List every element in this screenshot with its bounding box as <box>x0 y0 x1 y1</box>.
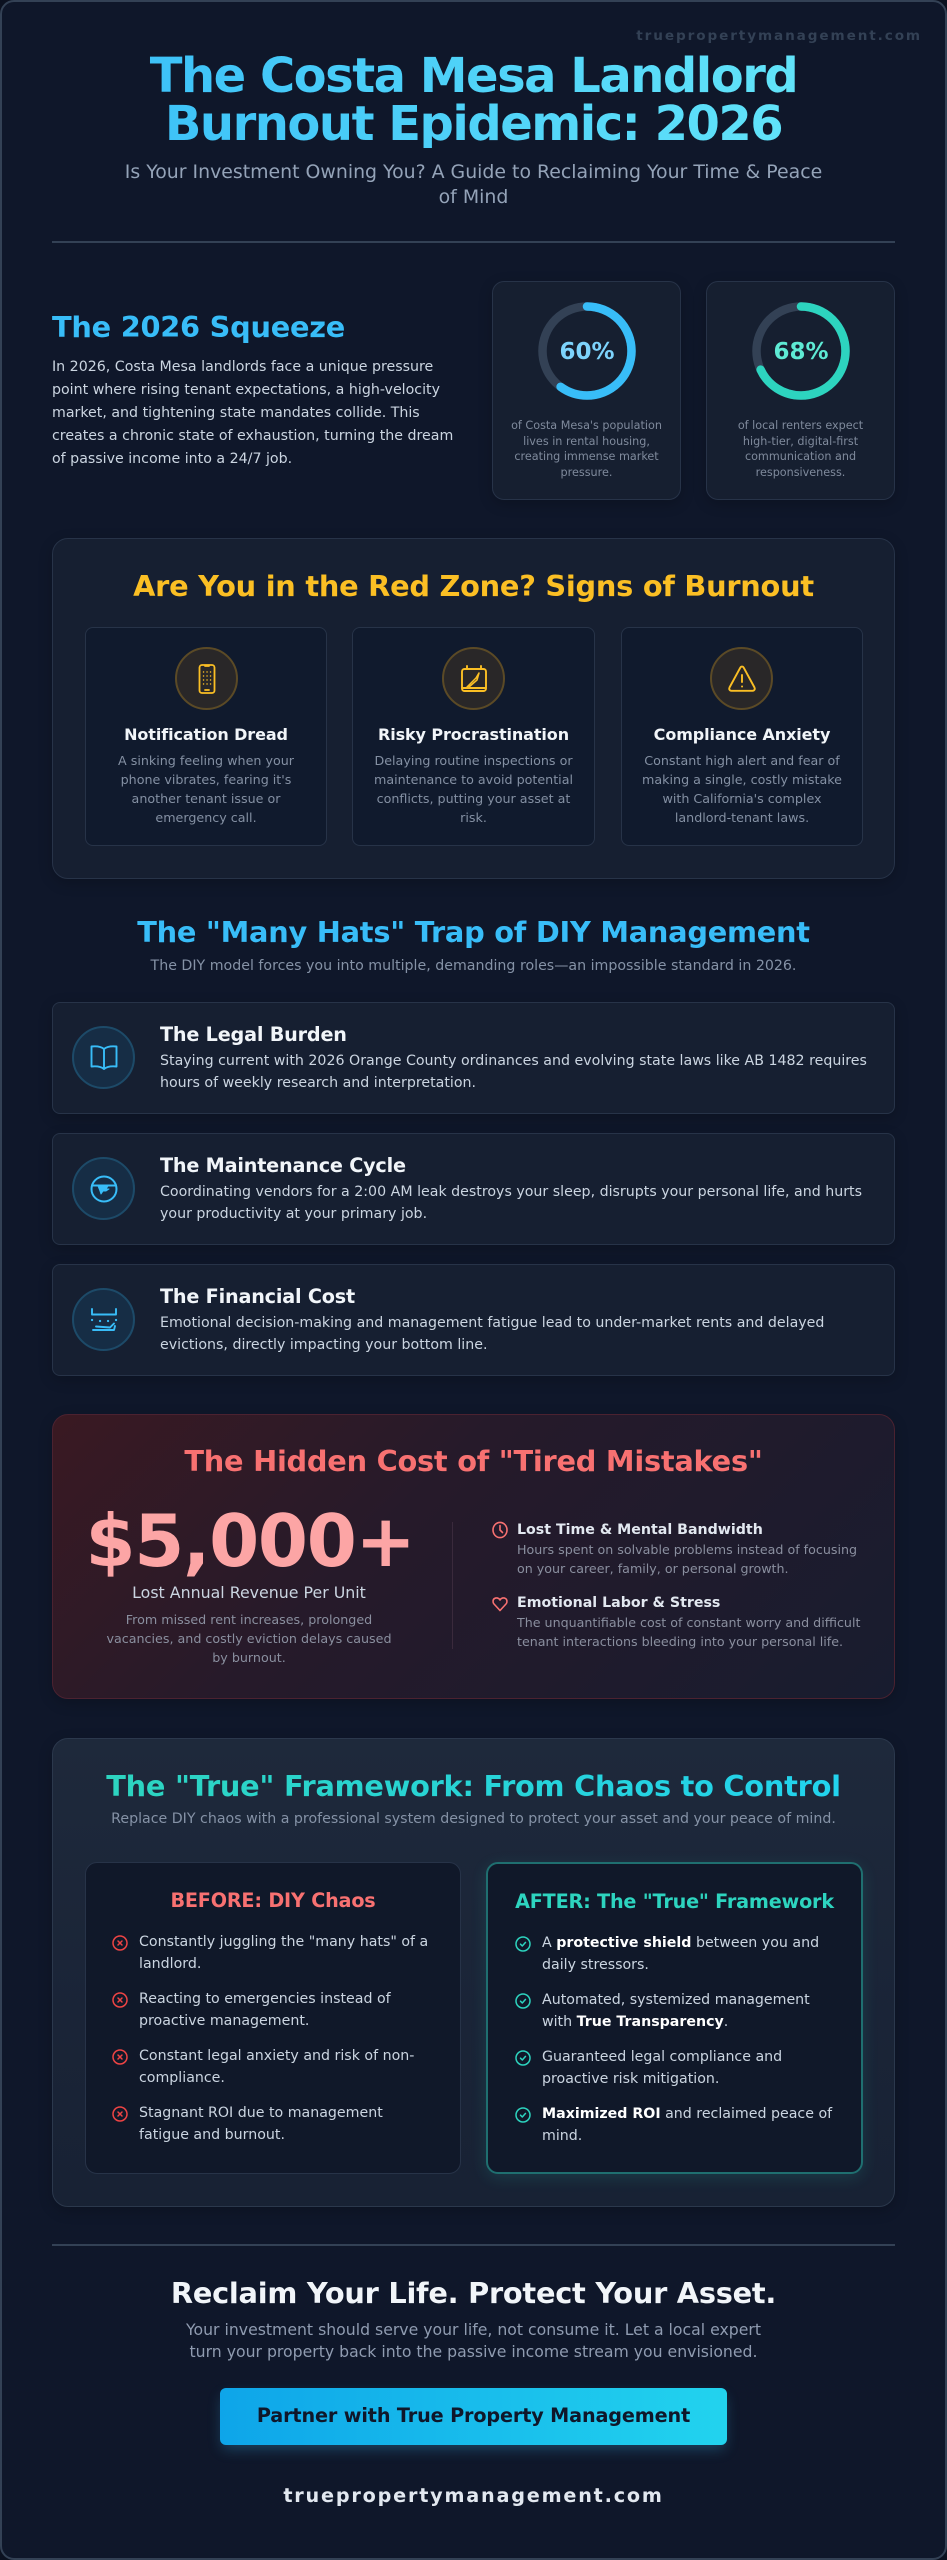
card text: emergency call. <box>155 810 257 825</box>
before item 1 <box>112 1934 428 1972</box>
squeeze body text: creates a chronic state of exhaustion, turning the dream <box>52 428 453 444</box>
panel: the legal burden <box>52 1002 895 1114</box>
item text: on your career, family, or personal growth. <box>517 1561 789 1576</box>
stat caption: pressure. <box>561 466 612 479</box>
icon: open book <box>72 1026 135 1089</box>
item text: proactive risk mitigation. <box>542 2071 719 2087</box>
role text: your productivity at your primary job. <box>160 1206 427 1222</box>
before item 2 <box>112 1991 391 2029</box>
icon: x circle <box>112 2106 128 2122</box>
item text <box>517 1542 857 1576</box>
icon: check circle <box>515 2050 531 2066</box>
item text: Constantly juggling the "many hats" of a <box>139 1934 428 1950</box>
card text <box>374 753 573 825</box>
role text: Staying current with 2026 Orange County ordinances and evolving state laws like AB 1482 requires <box>160 1053 867 1069</box>
stat caption: creating immense market <box>514 450 659 463</box>
item title: Lost Time & Mental Bandwidth <box>517 1522 763 1538</box>
subtitle: Is Your Investment Owning You? A Guide to Reclaiming Your Time & Peace <box>125 161 822 183</box>
role title: The Financial Cost <box>160 1285 355 1308</box>
card title: Risky Procrastination <box>378 725 569 744</box>
card: notification dread <box>85 627 327 846</box>
cost item: lost time <box>492 1522 857 1576</box>
card: compliance anxiety <box>621 627 863 846</box>
item text <box>542 1992 810 2030</box>
item text: with True Transparency. <box>542 2014 728 2030</box>
stat caption: of local renters expect <box>738 419 863 432</box>
item text: landlord. <box>139 1956 201 1972</box>
icon: phone <box>175 647 238 710</box>
item text <box>139 1991 391 2029</box>
icon: check circle <box>515 1993 531 2009</box>
ring chart: 60%: 60% <box>559 339 615 365</box>
icon: x circle <box>112 1992 128 2008</box>
ring chart: 68%: 68% <box>773 339 829 365</box>
title: Burnout Epidemic: 2026 <box>165 96 782 152</box>
item text: daily stressors. <box>542 1957 649 1973</box>
card text: making a single, costly mistake <box>642 772 842 787</box>
footer url: truepropertymanagement.com <box>283 2484 664 2507</box>
panel: the maintenance cycle <box>52 1133 895 1245</box>
framework subtitle: Replace DIY chaos with a professional system designed to protect your asset and your peace of mind. <box>111 1811 836 1827</box>
after heading: AFTER: The "True" Framework <box>515 1890 834 1913</box>
cta text: Your investment should serve your life, not consume it. Let a local expert <box>186 2320 761 2339</box>
icon: warning triangle <box>710 647 773 710</box>
squeeze body text: point where rising tenant expectations, a high-velocity <box>52 382 440 398</box>
card text: landlord-tenant laws. <box>675 810 809 825</box>
after item 3 <box>515 2049 782 2087</box>
role text: Emotional decision-making and management fatigue lead to under-market rents and delayed <box>160 1315 824 1331</box>
cta button <box>220 2388 727 2445</box>
squeeze body text: In 2026, Costa Mesa landlords face a unique pressure <box>52 359 433 375</box>
role text <box>160 1315 824 1353</box>
icon: financial chart <box>72 1288 135 1351</box>
stat caption: of Costa Mesa's population <box>511 419 662 432</box>
ring chart: 60% <box>538 302 636 400</box>
panel: stat 60% <box>492 281 681 500</box>
cta text <box>52 2319 895 2363</box>
after item 4 <box>515 2104 850 2148</box>
icon: heart <box>492 1597 508 1612</box>
after item 2 <box>515 1992 810 2030</box>
card title: Compliance Anxiety <box>654 725 830 744</box>
big number note: by burnout. <box>212 1650 286 1665</box>
title: The Costa Mesa Landlord <box>150 48 797 104</box>
big number note: From missed rent increases, prolonged <box>126 1612 372 1627</box>
cta button: Partner with True Property Management <box>257 2404 690 2427</box>
item text: Hours spent on solvable problems instead of focusing <box>517 1542 857 1557</box>
item text: Guaranteed legal compliance and <box>542 2049 782 2065</box>
subtitle <box>125 161 822 208</box>
item text: The unquantifiable cost of constant worry and difficult <box>517 1615 860 1630</box>
item title: Emotional Labor & Stress <box>517 1595 720 1611</box>
role text <box>160 1184 862 1222</box>
title <box>52 53 895 148</box>
panel: red zone signs of burnout <box>52 538 895 879</box>
item text <box>139 2105 383 2143</box>
panel: hidden cost of tired mistakes <box>52 1414 895 1699</box>
item text <box>542 2047 782 2091</box>
stat caption: lives in rental housing, <box>523 435 650 448</box>
card title: Notification Dread <box>124 725 288 744</box>
role text: evictions, directly impacting your bottom line. <box>160 1337 487 1353</box>
card text <box>642 753 842 825</box>
card text: risk. <box>460 810 487 825</box>
item text <box>542 2104 832 2148</box>
heading: The Hidden Cost of "Tired Mistakes" <box>184 1444 763 1478</box>
card text <box>118 753 294 825</box>
item text: Automated, systemized management <box>542 1992 810 2008</box>
cost item: emotional labor <box>492 1595 860 1649</box>
heading: Are You in the Red Zone? Signs of Burnout <box>133 569 814 603</box>
item text: proactive management. <box>139 2013 309 2029</box>
panel: stat 68% <box>706 281 895 500</box>
icon: clock <box>492 1522 508 1538</box>
icon: wrench dial <box>72 1157 135 1220</box>
card: after true framework <box>486 1862 863 2174</box>
stat caption: communication and <box>745 450 856 463</box>
card text: Constant high alert and fear of <box>644 753 840 768</box>
big number note: vacancies, and costly eviction delays caused <box>106 1631 392 1646</box>
icon: check circle <box>515 2107 531 2123</box>
squeeze body text <box>52 359 453 467</box>
panel: the financial cost <box>52 1264 895 1376</box>
heading: The "True" Framework: From Chaos to Control <box>106 1769 841 1803</box>
stat caption: responsiveness. <box>756 466 845 479</box>
icon: calendar with pen <box>442 647 505 710</box>
big number label: Lost Annual Revenue Per Unit <box>132 1583 366 1602</box>
stat caption <box>511 419 662 479</box>
card text: A sinking feeling when your <box>118 753 294 768</box>
icon: x circle <box>112 1935 128 1951</box>
card: before DIY chaos <box>85 1862 461 2174</box>
stat caption <box>738 419 863 479</box>
item text: tenant interactions bleeding into your personal life. <box>517 1634 843 1649</box>
role text <box>160 1053 867 1091</box>
subtitle: of Mind <box>439 186 508 208</box>
role text: hours of weekly research and interpretation. <box>160 1075 476 1091</box>
item text <box>139 2048 414 2086</box>
card text: with California's complex <box>662 791 822 806</box>
item text <box>139 1934 428 1972</box>
cta text: turn your property back into the passive income stream you envisioned. <box>190 2342 757 2361</box>
cta heading: Reclaim Your Life. Protect Your Asset. <box>171 2276 776 2310</box>
item text: A protective shield between you and <box>542 1935 819 1951</box>
item text: Constant legal anxiety and risk of non- <box>139 2048 414 2064</box>
big number note <box>106 1612 392 1665</box>
before item 4 <box>112 2105 383 2143</box>
role title: The Maintenance Cycle <box>160 1154 406 1177</box>
item text: fatigue and burnout. <box>139 2127 285 2143</box>
before item 3 <box>112 2048 414 2086</box>
big number: $5,000+ <box>85 1499 415 1583</box>
panel: true framework <box>52 1738 895 2207</box>
item text: Stagnant ROI due to management <box>139 2105 383 2121</box>
squeeze body text: of passive income into a 24/7 job. <box>52 451 292 467</box>
card text: another tenant issue or <box>132 791 280 806</box>
card text: phone vibrates, fearing it's <box>121 772 291 787</box>
card text: maintenance to avoid potential <box>374 772 573 787</box>
role title: The Legal Burden <box>160 1023 347 1046</box>
card text: conflicts, putting your asset at <box>377 791 570 806</box>
heading: many hats trap: The "Many Hats" Trap of DIY Management <box>137 915 810 949</box>
item text <box>542 1935 819 1973</box>
squeeze body text: market, and tightening state mandates collide. This <box>52 405 420 421</box>
role text: Coordinating vendors for a 2:00 AM leak destroys your sleep, disrupts your personal life, and hurts <box>160 1184 862 1200</box>
heading: the 2026 squeeze: The 2026 Squeeze <box>52 310 345 344</box>
card text: Delaying routine inspections or <box>374 753 573 768</box>
ring chart: 68% <box>752 302 850 400</box>
card: risky procrastination <box>352 627 595 846</box>
after item 1 <box>515 1935 819 1973</box>
before heading: BEFORE: DIY Chaos <box>170 1889 376 1912</box>
item text: Reacting to emergencies instead of <box>139 1991 391 2007</box>
item text: Maximized ROI and reclaimed peace of <box>542 2106 832 2122</box>
watermark url: truepropertymanagement.com <box>636 28 922 44</box>
many hats subtitle: The DIY model forces you into multiple, demanding roles—an impossible standard in 2026. <box>151 958 796 974</box>
icon: x circle <box>112 2049 128 2065</box>
stat caption: high-tier, digital-first <box>743 435 858 448</box>
item text: mind. <box>542 2128 582 2144</box>
item text: compliance. <box>139 2070 225 2086</box>
icon: check circle <box>515 1936 531 1952</box>
item text <box>516 1615 860 1649</box>
